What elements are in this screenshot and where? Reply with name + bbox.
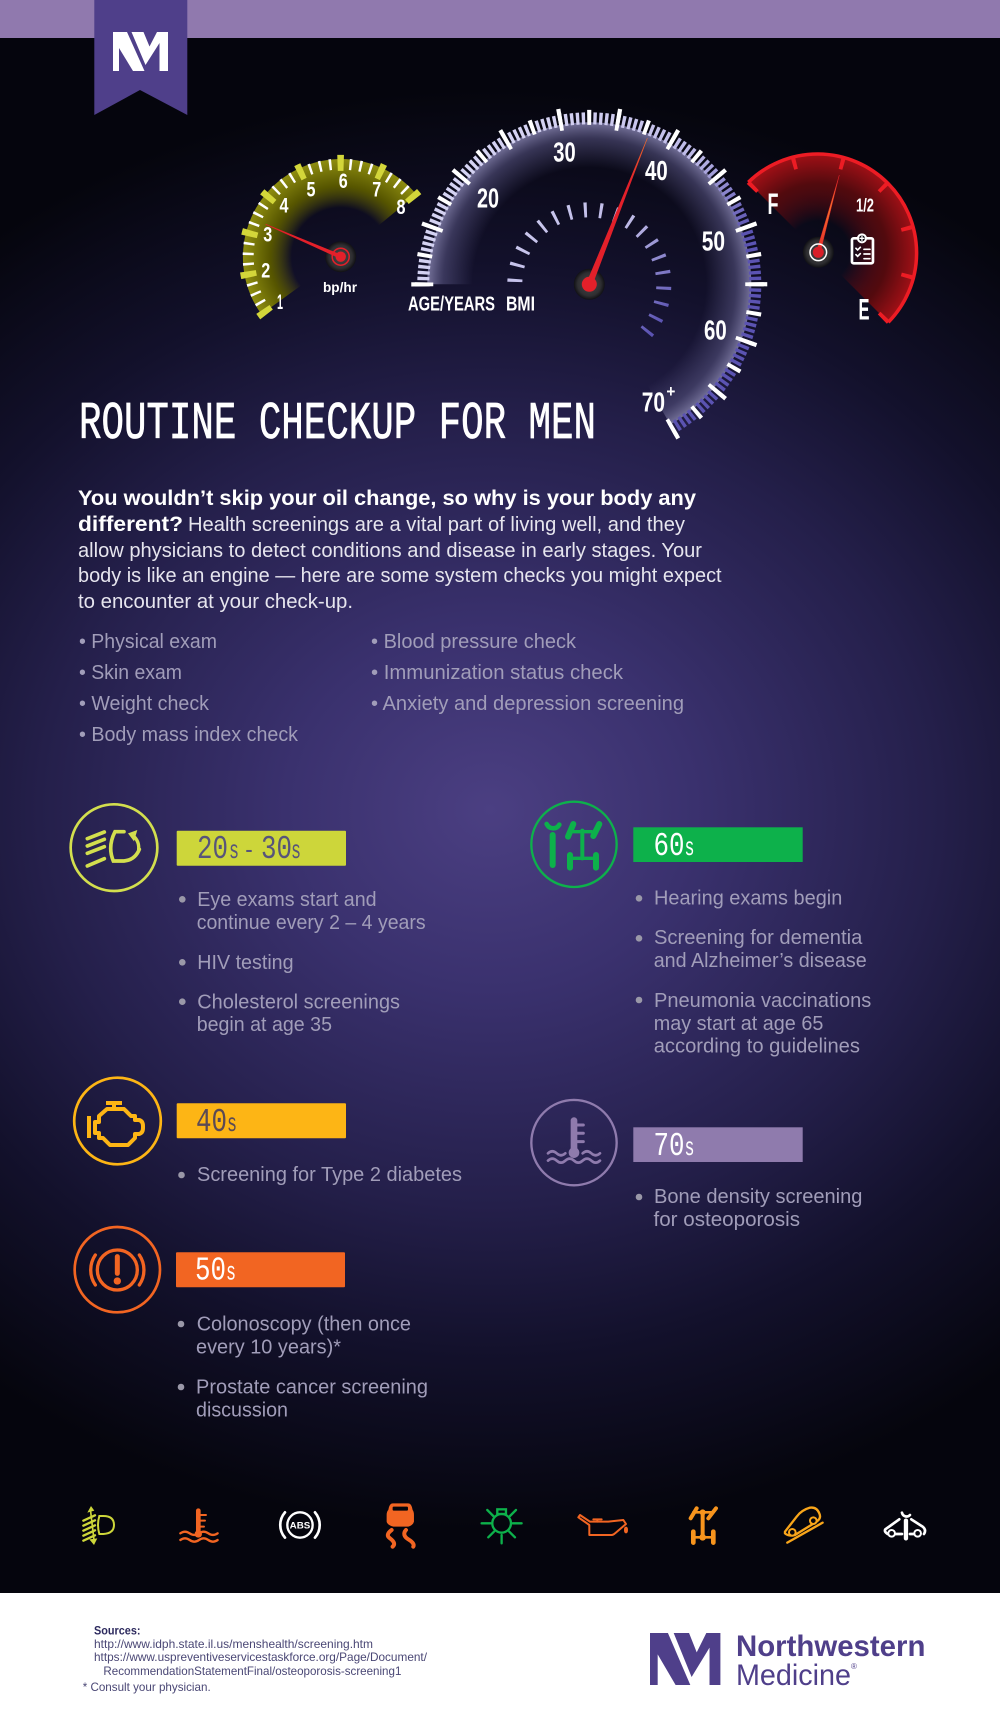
bullet list: 60s: Pneumonia vaccinations	[654, 989, 871, 1012]
gauge: blood pressure: 1	[277, 291, 283, 314]
panel: 60s: 60	[654, 828, 684, 865]
gauge: fuel tank: 1/2	[856, 196, 874, 216]
gauge: age and BMI: 30	[553, 137, 576, 168]
panel: 40s: s	[227, 1109, 237, 1139]
gauge: age and BMI: AGE/YEARS	[408, 294, 495, 316]
sources: * Consult your physician.	[83, 1680, 211, 1694]
bullet list: 70s: Bone density screening	[654, 1185, 862, 1208]
gauge: fuel tank: F	[768, 188, 778, 221]
icon: car on slope	[785, 1508, 823, 1543]
checklist: • Body mass index check	[79, 723, 299, 746]
sources: Sources:	[94, 1624, 140, 1638]
dashboard icon row	[83, 1503, 925, 1547]
icon: check engine	[74, 1078, 161, 1164]
gauge: blood pressure: 4	[280, 194, 289, 218]
bullet list: 20s to 30s: begin at age 35	[197, 1013, 332, 1036]
gauge: blood pressure: 5	[306, 178, 316, 202]
checklist: • Skin exam	[79, 661, 182, 684]
intro paragraph: Health screenings are a vital part of living well, and they	[188, 513, 686, 536]
intro paragraph: allow physicians to detect conditions and disease in early stages. Your	[78, 539, 702, 562]
top band	[0, 0, 1000, 38]
gauge: blood pressure: 6	[339, 170, 348, 193]
bullet list: 20s to 30s	[179, 888, 426, 1036]
gauge: fuel tank	[738, 154, 917, 332]
Northwestern Medicine logo: Medicine	[736, 1659, 851, 1692]
panel: 20s to 30s: 20	[197, 831, 228, 868]
ribbon with NM logo	[94, 0, 187, 115]
checklist: • Immunization status check	[371, 661, 624, 684]
gauge: age and BMI: BMI	[506, 294, 535, 316]
icon: brake warning	[75, 1227, 160, 1312]
bullet list: 60s: may start at age 65	[654, 1012, 823, 1035]
panel: 40s	[74, 1078, 462, 1186]
icon: headlight	[71, 804, 157, 891]
gauge: blood pressure	[243, 159, 424, 327]
bullet list: 70s: for osteoporosis	[654, 1208, 800, 1231]
bullet list: 50s: Colonoscopy (then once	[197, 1313, 411, 1336]
bullet list: 40s: Screening for Type 2 diabetes	[197, 1163, 462, 1186]
panel: 40s: 40	[196, 1104, 227, 1141]
bullet list: 50s: every 10 years)*	[196, 1336, 341, 1359]
bullet list: 20s to 30s: Eye exams start and	[197, 888, 377, 911]
checklist: • Weight check	[79, 692, 210, 715]
gauge: age and BMI: 20	[477, 183, 499, 214]
icon: ABS: ABS	[290, 1520, 310, 1530]
footer panel	[0, 1593, 1000, 1725]
panel: 20s to 30s: 30	[261, 831, 292, 868]
sources	[83, 1624, 428, 1694]
bullet list: 20s to 30s: Cholesterol screenings	[197, 990, 400, 1013]
panel: 70s	[531, 1100, 862, 1231]
sources: http://www.idph.state.il.us/menshealth/screening.htm	[94, 1637, 373, 1651]
bullet list: 60s: Hearing exams begin	[654, 886, 842, 909]
Northwestern Medicine logo: Northwestern	[736, 1630, 925, 1663]
panel: 20s to 30s	[71, 804, 426, 1036]
panel: 70s: s	[684, 1133, 694, 1163]
bullet list: 20s to 30s: HIV testing	[197, 951, 294, 974]
panel: 50s: s	[226, 1258, 236, 1288]
icon: skidding car	[387, 1503, 414, 1547]
icon: headlight level	[83, 1506, 114, 1545]
bullet list: 20s to 30s: continue every 2 – 4 years	[197, 911, 426, 934]
bullet list: 60s	[636, 886, 871, 1058]
bullet list: 60s: and Alzheimer’s disease	[654, 949, 867, 972]
icon: coolant temperature	[531, 1100, 617, 1185]
icon: oil can	[578, 1515, 627, 1535]
panel: 20s to 30s: s	[291, 836, 301, 866]
intro paragraph: to encounter at your check-up.	[78, 590, 353, 613]
checklist: • Anxiety and depression screening	[371, 692, 684, 715]
Northwestern Medicine logo: ®	[851, 1662, 857, 1671]
bullet list: 60s: Screening for dementia	[654, 926, 863, 949]
gauge: blood pressure: 7	[372, 178, 381, 202]
panel: 60s	[531, 802, 871, 1058]
panel: 20s to 30s: s	[229, 836, 239, 866]
checklist: • Physical exam	[79, 630, 217, 653]
checklist: • Blood pressure check	[371, 630, 577, 653]
bullet list: 70s	[636, 1185, 862, 1231]
icon: drivetrain	[691, 1508, 716, 1543]
icon: clipboard	[852, 234, 873, 263]
intro paragraph	[78, 487, 722, 613]
gauge: age and BMI: 60	[704, 314, 727, 345]
gauge: age and BMI: 40	[645, 155, 668, 186]
panel: 50s: 50	[195, 1252, 226, 1290]
bullet list: 50s: Prostate cancer screening	[196, 1376, 428, 1398]
icon: exterior bulb	[482, 1509, 522, 1543]
gauge: age and BMI	[408, 117, 756, 441]
icon: coolant	[180, 1511, 218, 1542]
bullet list: 50s	[178, 1313, 428, 1422]
panel: 60s: s	[684, 833, 694, 863]
gauge: age and BMI: 50	[702, 226, 725, 257]
intro paragraph: You wouldn’t skip your oil change, so why is your body any	[78, 487, 696, 510]
panel: 70s: 70	[654, 1128, 684, 1165]
icon: car service wrench	[885, 1513, 925, 1538]
sources: RecommendationStatementFinal/osteoporosis-screening1	[103, 1664, 402, 1678]
intro paragraph: different?	[78, 513, 183, 536]
gauge: fuel tank: E	[858, 293, 870, 326]
sources: https://www.uspreventiveservicestaskforce.org/Page/Document/	[94, 1650, 428, 1664]
bullet list: 60s: according to guidelines	[654, 1035, 860, 1058]
intro paragraph: body is like an engine — here are some system checks you might expect	[78, 564, 722, 587]
checklist	[79, 630, 684, 746]
bullet list: 50s: discussion	[196, 1398, 288, 1422]
icon: ABS	[280, 1512, 320, 1538]
title: ROUTINE CHECKUP FOR MEN	[79, 394, 596, 454]
gauge: blood pressure: bp/hr	[323, 279, 358, 295]
gauge: age and BMI: 70	[642, 387, 665, 418]
gauge: age and BMI: +	[666, 382, 675, 401]
panel: 20s to 30s: -	[243, 836, 255, 866]
Northwestern Medicine logo	[650, 1630, 925, 1692]
panel: 50s	[75, 1227, 428, 1422]
icon: wrench and chassis	[531, 802, 617, 887]
gauge: blood pressure: 3	[263, 224, 272, 246]
gauge: blood pressure: 2	[261, 260, 270, 282]
gauge: blood pressure: 8	[396, 196, 406, 219]
